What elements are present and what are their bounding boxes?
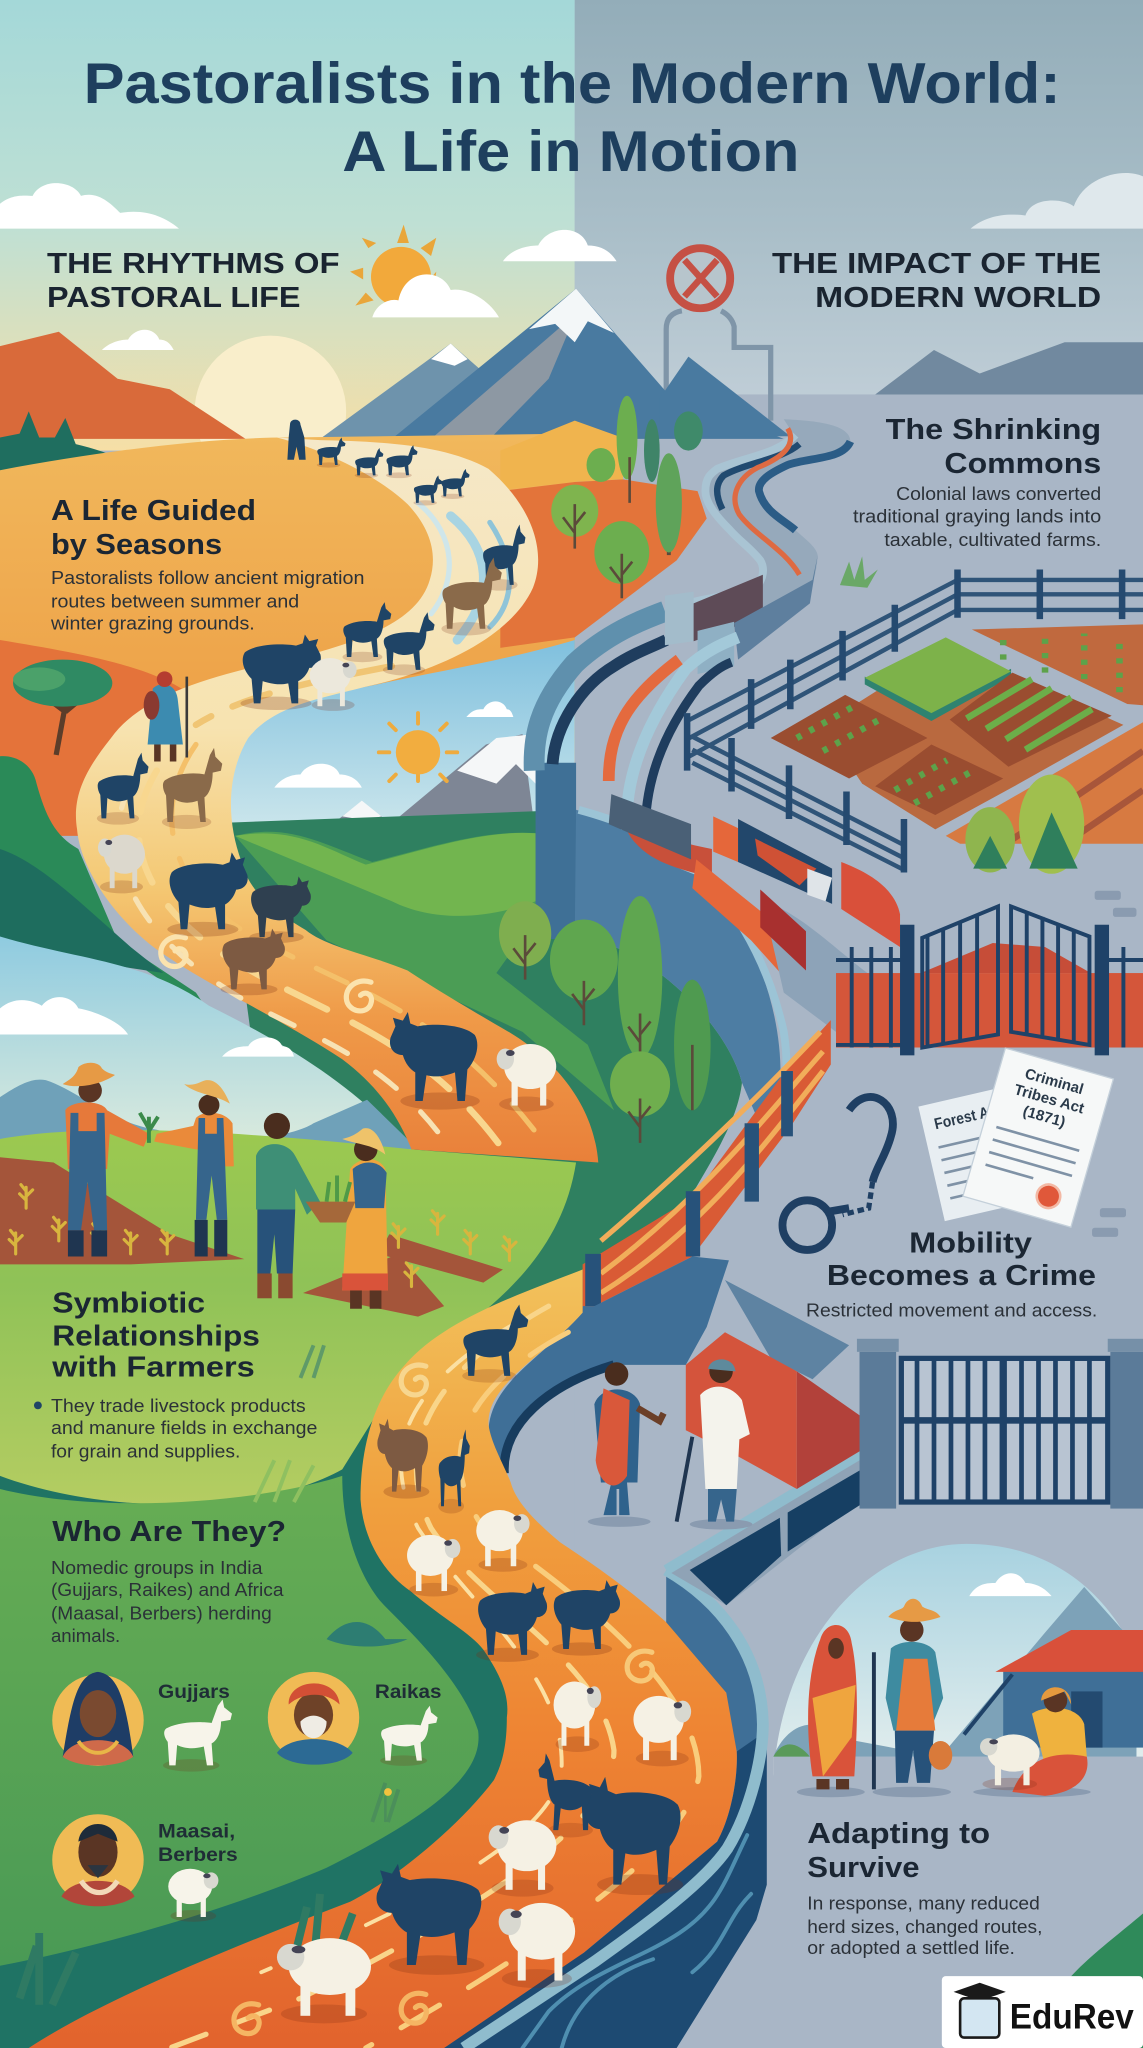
text: life guided by seasons: winter grazing grounds.	[50, 613, 255, 634]
heading: impact: THE IMPACT OF THE	[772, 248, 1101, 280]
text: who are they: Nomedic groups in India	[51, 1557, 263, 1578]
central sky with mountains	[222, 640, 575, 862]
hut with red roof	[964, 1630, 1143, 1748]
green hills centre	[222, 810, 742, 1358]
text: symbiotic relationships: for grain and supplies.	[51, 1441, 240, 1462]
farmer one	[63, 1063, 158, 1256]
yellow hill right	[500, 421, 623, 490]
red inner wall and orange band	[624, 816, 901, 1045]
land lower left orange	[0, 640, 196, 836]
lower fence wall with red slats	[583, 1020, 831, 1313]
road edges and centre line	[692, 428, 850, 602]
grass tuft	[840, 556, 878, 588]
central blue wall	[536, 763, 786, 1149]
text: adapting to survive: In response, many reduced	[807, 1893, 1040, 1914]
farm plots	[771, 624, 1143, 844]
person: elder in white	[677, 1359, 752, 1529]
text: mobility becomes a crime: Becomes a Crime	[827, 1260, 1096, 1292]
distant mountains right	[875, 342, 1143, 394]
icon: white goats and sheep	[163, 1700, 438, 1922]
logo: EduRev	[942, 1976, 1143, 2048]
flower	[384, 1788, 392, 1822]
man trading	[256, 1113, 320, 1298]
portrait: Maasai	[52, 1814, 144, 1906]
text: adapting to survive	[807, 1818, 1042, 1958]
text: shrinking commons: traditional graying lands into	[853, 505, 1101, 526]
person: herder with staff	[873, 1599, 952, 1797]
person: officer with scroll	[588, 1362, 664, 1527]
sun disc behind mountains	[195, 336, 346, 487]
text: mobility becomes a crime: Mobility	[909, 1228, 1032, 1260]
sky: left warm half	[0, 0, 575, 451]
blue ground beneath fence	[488, 1256, 729, 1469]
arch scene hills	[773, 1587, 1136, 1757]
bottom right green hill	[1032, 1913, 1143, 2048]
soil plots with crops	[0, 1157, 516, 1317]
text: adapting to survive: or adopted a settled life.	[807, 1937, 1015, 1958]
snowy mountains	[320, 289, 790, 439]
text: adapting to survive: herd sizes, changed routes,	[807, 1916, 1042, 1937]
document: Criminal Tribes Act: Tribes Act	[1012, 1081, 1086, 1117]
labels: groups: Berbers	[158, 1844, 238, 1866]
title: A Life in Motion	[342, 120, 799, 184]
text: who are they: Who Are They?	[52, 1516, 286, 1548]
fence posts	[687, 569, 1122, 872]
text: life guided by seasons: by Seasons	[51, 529, 222, 561]
text: symbiotic relationships: They trade livestock products	[51, 1395, 306, 1416]
text: adapting to survive: Adapting to	[807, 1818, 990, 1850]
teal base	[0, 1411, 549, 2048]
icon: sun with cloud	[350, 225, 499, 317]
arch scene	[773, 1544, 1143, 1776]
shepherd silhouette	[287, 420, 306, 460]
ground in arch	[773, 1757, 1143, 1822]
small sun	[379, 713, 457, 781]
woman with basket	[306, 1128, 388, 1309]
document: Criminal Tribes Act: (1871)	[1021, 1103, 1067, 1131]
logo: EduRev: EduRev	[1010, 1997, 1134, 2036]
road streaks lower	[170, 1306, 699, 2048]
text: who are they: animals.	[51, 1625, 120, 1646]
road: upper migration path	[76, 438, 598, 1162]
arch scene cloud	[969, 1573, 1052, 1596]
heading: rhythms: THE RHYTHMS OF	[47, 248, 340, 280]
document: Forest Acts: Forest Acts	[933, 1100, 1011, 1133]
text: who are they: (Gujjars, Raikes) and Africa	[51, 1579, 284, 1600]
lower left blue hills	[0, 1080, 418, 1149]
document: Criminal Tribes Act	[963, 1048, 1113, 1227]
farmers group	[63, 1063, 388, 1309]
grey wedge	[725, 1280, 849, 1379]
portrait: Gujjars	[52, 1672, 144, 1766]
orange field by trees	[500, 479, 707, 648]
text: life guided by seasons	[50, 495, 364, 634]
trees: top orange field	[551, 396, 703, 598]
wall blocks	[665, 555, 818, 674]
title: Pastoralists in the Modern World:	[84, 52, 1061, 116]
gate upper	[836, 906, 1143, 1055]
person: walking shepherd	[144, 671, 187, 761]
text: life guided by seasons: routes between summer and	[51, 590, 299, 611]
orange wall section	[713, 816, 738, 862]
herd: middle path	[97, 748, 556, 1112]
text: mobility becomes a crime: Restricted movement and access.	[806, 1300, 1097, 1321]
ground: right grey half	[575, 394, 1143, 2048]
river dark water	[444, 1731, 767, 2048]
dark green bushes	[0, 411, 157, 479]
heading: impact: MODERN WORLD	[815, 282, 1101, 314]
text: symbiotic relationships: with Farmers	[51, 1352, 255, 1384]
red hut	[686, 1332, 862, 1489]
text: symbiotic relationships	[34, 1288, 317, 1462]
labels: groups: Gujjars	[158, 1681, 230, 1703]
green blob behind who are they	[0, 1476, 479, 1966]
lower gate	[857, 1339, 1143, 1509]
text: symbiotic relationships: and manure fields in exchange	[51, 1417, 317, 1438]
document: Forest Acts	[918, 1084, 1042, 1221]
farm field lime	[0, 1130, 576, 1508]
text: life guided by seasons: Pastoralists follow ancient migration	[51, 567, 364, 588]
upper land orange-yellow	[0, 434, 575, 784]
arch scene bush	[773, 1744, 810, 1757]
text: symbiotic relationships: Symbiotic	[52, 1288, 205, 1320]
poster on wall	[738, 819, 832, 904]
document: Criminal Tribes Act: Criminal	[1023, 1065, 1085, 1098]
road: lower migration path	[29, 1270, 737, 2048]
text: symbiotic relationships: Relationships	[52, 1320, 260, 1352]
small clouds	[274, 701, 513, 788]
portrait: Raikas	[268, 1672, 359, 1765]
labels: groups: Raikas	[375, 1681, 442, 1703]
icon: prohibited sign on pipes	[666, 248, 771, 421]
sky: right grey half	[575, 0, 1143, 451]
clouds	[0, 173, 1143, 350]
labels: groups: Maasai,	[158, 1821, 235, 1843]
text: adapting to survive: Survive	[807, 1852, 920, 1884]
left green hill	[0, 756, 209, 1012]
labels: groups	[158, 1681, 442, 1866]
tree: acacia left	[13, 660, 112, 755]
bushes	[965, 775, 1084, 874]
text: shrinking commons: Colonial laws converted	[896, 483, 1101, 504]
herd: lower path	[277, 1305, 691, 2023]
orange mountain	[0, 332, 246, 439]
light blue river rim	[464, 1570, 763, 2048]
text: life guided by seasons: A Life Guided	[51, 495, 256, 527]
red wall panel	[841, 862, 900, 947]
text: mobility becomes a crime	[806, 1228, 1097, 1321]
icon: handcuffs	[782, 1097, 893, 1250]
person: woman in red sari	[797, 1625, 865, 1797]
grass tufts	[20, 1345, 398, 2005]
title	[84, 52, 1061, 184]
grey panel	[609, 794, 691, 859]
dark rim of grey yard	[504, 1365, 614, 1473]
small blue bush	[327, 1622, 408, 1647]
text: shrinking commons: The Shrinking	[886, 414, 1101, 446]
heading: rhythms: PASTORAL LIFE	[47, 282, 300, 314]
lower left clouds	[0, 997, 294, 1057]
inner curved wall	[609, 637, 738, 878]
text: shrinking commons: taxable, cultivated farms.	[884, 529, 1101, 550]
text: who are they: (Maasal, Berbers) herding	[51, 1603, 272, 1624]
heading: rhythms	[47, 248, 340, 314]
grey winding road at top	[665, 419, 850, 633]
road streaks upper	[118, 503, 549, 1149]
diagonal wall with dark panels	[666, 1443, 878, 1605]
bricks	[1092, 891, 1136, 1237]
herd: upper path	[240, 420, 525, 711]
trees: central green	[499, 896, 711, 1143]
fence upper	[687, 580, 1143, 870]
text: shrinking commons	[853, 414, 1101, 550]
lower left sky	[0, 936, 411, 1149]
river blue wall band	[666, 1570, 764, 1752]
heading: impact	[772, 248, 1101, 314]
left side trees and decorations	[13, 396, 711, 2005]
farmer two	[154, 1080, 234, 1256]
text: who are they	[51, 1516, 286, 1646]
person: seated woman with sheep	[973, 1687, 1091, 1797]
outer curved wall	[534, 611, 666, 771]
text: shrinking commons: Commons	[944, 448, 1101, 480]
dark red wall panel	[760, 889, 806, 970]
